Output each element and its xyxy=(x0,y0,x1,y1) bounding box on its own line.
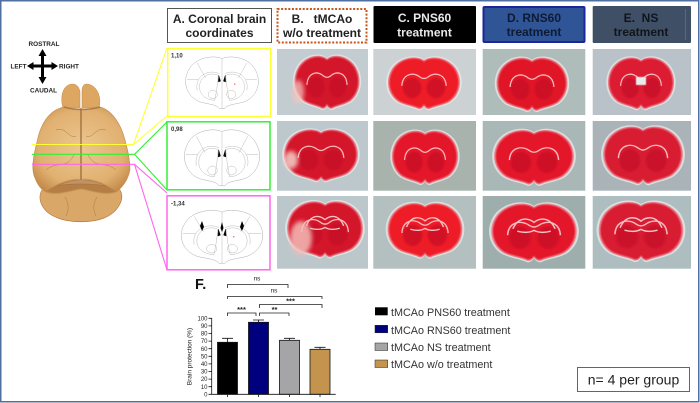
significance brackets: ns xyxy=(254,276,261,282)
photo: B row 2 xyxy=(277,121,368,191)
significance brackets: *** xyxy=(237,305,246,314)
header: A. Coronal brain coordinates: coordinates xyxy=(185,26,254,40)
y-axis tick labels: 60 xyxy=(201,347,208,353)
orientation compass xyxy=(11,41,79,94)
photo: B row 1 xyxy=(277,49,368,115)
atlas panel: 0,98 xyxy=(167,122,270,190)
header: E. NS treatment: E. NS xyxy=(624,11,658,25)
level line and zoom lines: magenta xyxy=(32,164,167,270)
header: C. PNS60 treatment xyxy=(374,6,476,43)
panel label F: F. xyxy=(195,277,206,293)
legend: tMCAo w/o treatment xyxy=(391,359,492,371)
y-axis tick labels: 40 xyxy=(201,362,208,368)
header: C. PNS60 treatment: C. PNS60 xyxy=(398,11,452,25)
atlas panel: 1,10: 1,10 xyxy=(171,54,183,60)
y-axis tick labels: 10 xyxy=(201,385,208,391)
y-axis tick labels: 20 xyxy=(201,377,208,383)
photo: C row 2 xyxy=(373,121,476,191)
header: C. PNS60 treatment: treatment xyxy=(397,26,452,40)
y-axis tick labels: 90 xyxy=(201,324,208,330)
photo grid: coronal TTC-stained brain slices xyxy=(277,49,691,269)
significance brackets: ns xyxy=(271,288,278,294)
header: D. RNS60 treatment xyxy=(484,7,584,42)
photo: E row 1 xyxy=(593,49,691,115)
photo: C row 3 xyxy=(373,196,476,269)
orientation compass: LEFT xyxy=(11,63,27,70)
y-axis tick labels: 100 xyxy=(197,316,208,322)
atlas panel: 1,10 xyxy=(168,48,271,116)
y-axis tick labels xyxy=(197,316,208,398)
y-axis tick labels: 30 xyxy=(201,370,208,376)
bars xyxy=(218,322,330,394)
illustration: mouse brain dorsal view xyxy=(33,84,130,222)
header: E. NS treatment xyxy=(593,6,691,43)
header: A. Coronal brain coordinates xyxy=(168,8,272,42)
header: B. tMCAo without treatment xyxy=(278,9,366,42)
header: B. tMCAo without treatment: w/o treatment xyxy=(282,26,361,40)
photo: E row 2 xyxy=(593,121,691,191)
y-axis tick labels: 70 xyxy=(201,339,208,345)
legend xyxy=(375,307,510,371)
y-axis tick labels: 80 xyxy=(201,332,208,338)
legend: tMCAo PNS60 treatment xyxy=(391,307,510,319)
photo: B row 3 xyxy=(277,196,368,269)
significance brackets: ** xyxy=(272,305,277,314)
header: E. NS treatment: treatment xyxy=(614,25,668,39)
orientation compass: ROSTRAL xyxy=(29,41,60,48)
sample size note: n= 4 per group xyxy=(588,372,679,388)
photo: D row 2 xyxy=(483,121,585,191)
photo: E row 3 xyxy=(593,196,691,269)
significance brackets xyxy=(228,276,322,316)
legend: tMCAo RNS60 treatment xyxy=(391,325,510,337)
sample size note xyxy=(578,368,690,392)
header: A. Coronal brain coordinates: A. Coronal brain xyxy=(173,12,266,26)
legend: tMCAo NS treatment xyxy=(391,342,491,354)
header: D. RNS60 treatment: D. RNS60 xyxy=(507,11,561,25)
level line and zoom lines: green xyxy=(32,122,167,190)
atlas panel: 0,98: 0,98 xyxy=(171,127,183,133)
atlas panel: -1,34: -1,34 xyxy=(171,202,185,208)
error bars xyxy=(222,320,326,349)
photo: D row 3 xyxy=(483,196,585,269)
y-axis tick labels: 50 xyxy=(201,354,208,360)
bar chart: brain protection xyxy=(186,316,336,398)
photo: C row 1 xyxy=(373,49,476,115)
atlas panel: -1,34 xyxy=(167,196,270,270)
y-axis title: Brain protection (%) xyxy=(186,328,194,385)
orientation compass: RIGHT xyxy=(59,64,79,70)
level line and zoom lines: yellow xyxy=(32,48,167,144)
significance brackets: *** xyxy=(286,296,295,306)
orientation compass: CAUDAL xyxy=(30,88,57,94)
header: D. RNS60 treatment: treatment xyxy=(507,25,561,39)
photo: D row 1 xyxy=(483,49,585,115)
header: B. tMCAo without treatment: B. tMCAo xyxy=(292,12,352,26)
y-axis tick labels: 0 xyxy=(204,392,208,398)
axes xyxy=(208,318,336,397)
